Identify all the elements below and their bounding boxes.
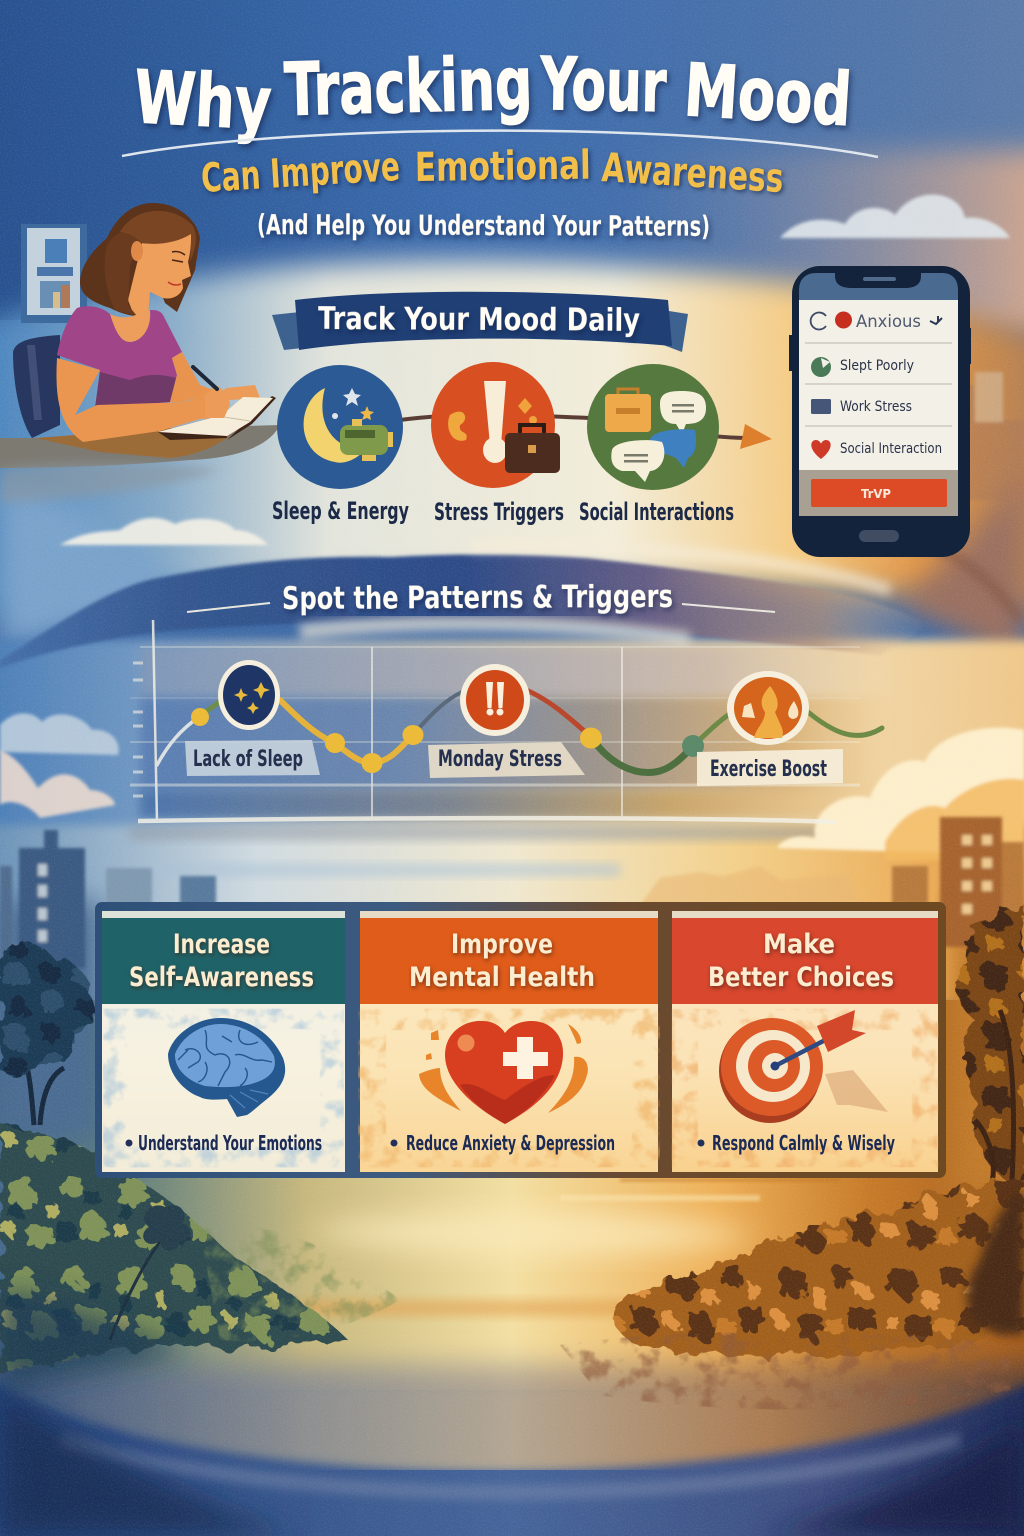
far arm	[170, 352, 213, 402]
cloud: mid right	[777, 728, 1024, 860]
title	[132, 42, 854, 147]
mood curve	[157, 690, 882, 773]
foliage: left tree	[0, 943, 92, 1125]
skyline: distant right	[950, 372, 1024, 500]
subtitle: Emotional	[414, 143, 591, 191]
banner: track your mood daily	[272, 292, 688, 352]
subtitle: Awareness	[600, 145, 785, 202]
label: monday stress: Monday Stress	[438, 747, 562, 772]
phone row: anxious: Anxious	[856, 312, 921, 332]
ear	[131, 241, 143, 261]
label: monday stress	[428, 742, 585, 778]
far hand	[220, 385, 260, 400]
skyline: lower right buildings	[892, 817, 1024, 947]
bullet	[698, 1131, 895, 1155]
foliage: right tree	[958, 905, 1024, 1190]
card: improve mental health	[360, 911, 658, 1172]
skyline: lower left buildings	[0, 830, 216, 968]
icon labels: Social Interactions	[579, 498, 734, 526]
benefit cards frame	[95, 902, 946, 1178]
phone row: anxious	[811, 312, 942, 332]
foliage: right bushes	[560, 1180, 1024, 1409]
woman journaling illustration	[0, 203, 280, 503]
phone row: work stress: Work Stress	[840, 399, 912, 415]
icon: sleep and energy	[277, 365, 403, 489]
phone mockup	[789, 266, 971, 557]
card: make better choices: Make	[763, 929, 835, 960]
card: improve mental health: Improve	[451, 929, 553, 960]
title: Tracking	[283, 42, 533, 133]
phone row: slept poorly: Slept Poorly	[840, 358, 915, 374]
phone row: social interaction	[811, 440, 942, 459]
tagline: (And Help You Understand Your Patterns)	[257, 208, 710, 243]
icon: brain	[168, 1018, 285, 1117]
timeline arrow	[400, 415, 772, 449]
hair top	[120, 211, 196, 262]
cloud: mid left pale	[0, 713, 119, 755]
notebook	[158, 396, 276, 440]
section heading: spot the patterns: Spot the Patterns & Triggers	[282, 579, 673, 617]
icon: social interactions	[587, 364, 719, 490]
icon labels: Stress Triggers	[434, 498, 564, 526]
icon: target with arrow	[719, 1010, 888, 1123]
title: Mood	[682, 48, 854, 143]
icon: stress triggers	[431, 362, 560, 488]
hair silhouette	[80, 203, 200, 316]
icon: heart with cross	[419, 1021, 588, 1124]
marker: monday stress	[460, 664, 530, 736]
clouds: upper right	[780, 195, 1010, 238]
bullet	[390, 1131, 615, 1155]
card: increase self-awareness: Self-Awareness	[129, 962, 314, 993]
subtitle	[200, 143, 785, 202]
chest skin	[110, 308, 150, 342]
phone mockup: TrVP	[861, 487, 891, 501]
near hand over page	[205, 386, 230, 418]
label: lack of sleep: Lack of Sleep	[193, 747, 303, 772]
desk	[0, 425, 280, 468]
curve data points	[191, 708, 704, 773]
near arm	[56, 358, 230, 442]
eye and smile	[168, 252, 185, 285]
card: improve mental health: Mental Health	[409, 962, 595, 993]
phone row: slept poorly	[811, 357, 915, 377]
chair	[13, 335, 60, 438]
face and neck	[128, 232, 191, 318]
phone row: social interaction: Social Interaction	[840, 441, 942, 457]
icon labels	[272, 497, 734, 526]
bullet	[126, 1131, 322, 1155]
label: exercise boost	[697, 749, 843, 786]
cloud: below icons	[60, 518, 268, 545]
mood line chart	[130, 620, 882, 822]
shirt shade	[95, 372, 176, 408]
marker: lack of sleep	[218, 660, 280, 730]
marker: exercise boost	[727, 671, 809, 745]
icon labels: Sleep & Energy	[272, 497, 409, 525]
hair lock	[105, 232, 143, 316]
phone button	[811, 479, 947, 507]
subtitle: Can Improve	[200, 144, 401, 202]
label: lack of sleep	[185, 740, 320, 776]
bullet: Understand Your Emotions	[138, 1131, 322, 1155]
cloud: mid left peach	[0, 750, 115, 818]
foliage: left bushes	[0, 1125, 400, 1390]
card: make better choices	[672, 911, 938, 1172]
banner: track your mood daily: Track Your Mood Daily	[318, 301, 640, 339]
phone row: work stress	[811, 399, 912, 415]
card: make better choices: Better Choices	[708, 962, 894, 993]
bullet: Reduce Anxiety & Depression	[406, 1131, 615, 1155]
shirt	[57, 306, 182, 408]
label: exercise boost: Exercise Boost	[710, 757, 827, 782]
chart axes and grid	[130, 620, 860, 822]
wall art	[21, 224, 87, 323]
title underline arc	[122, 131, 878, 157]
pen	[193, 367, 217, 389]
card: increase self-awareness	[102, 911, 345, 1172]
skyline: faint centre right	[640, 866, 860, 905]
bullet: Respond Calmly & Wisely	[712, 1131, 895, 1155]
title: Your	[539, 42, 668, 129]
card: increase self-awareness: Increase	[173, 929, 270, 960]
title: Why	[132, 55, 273, 147]
